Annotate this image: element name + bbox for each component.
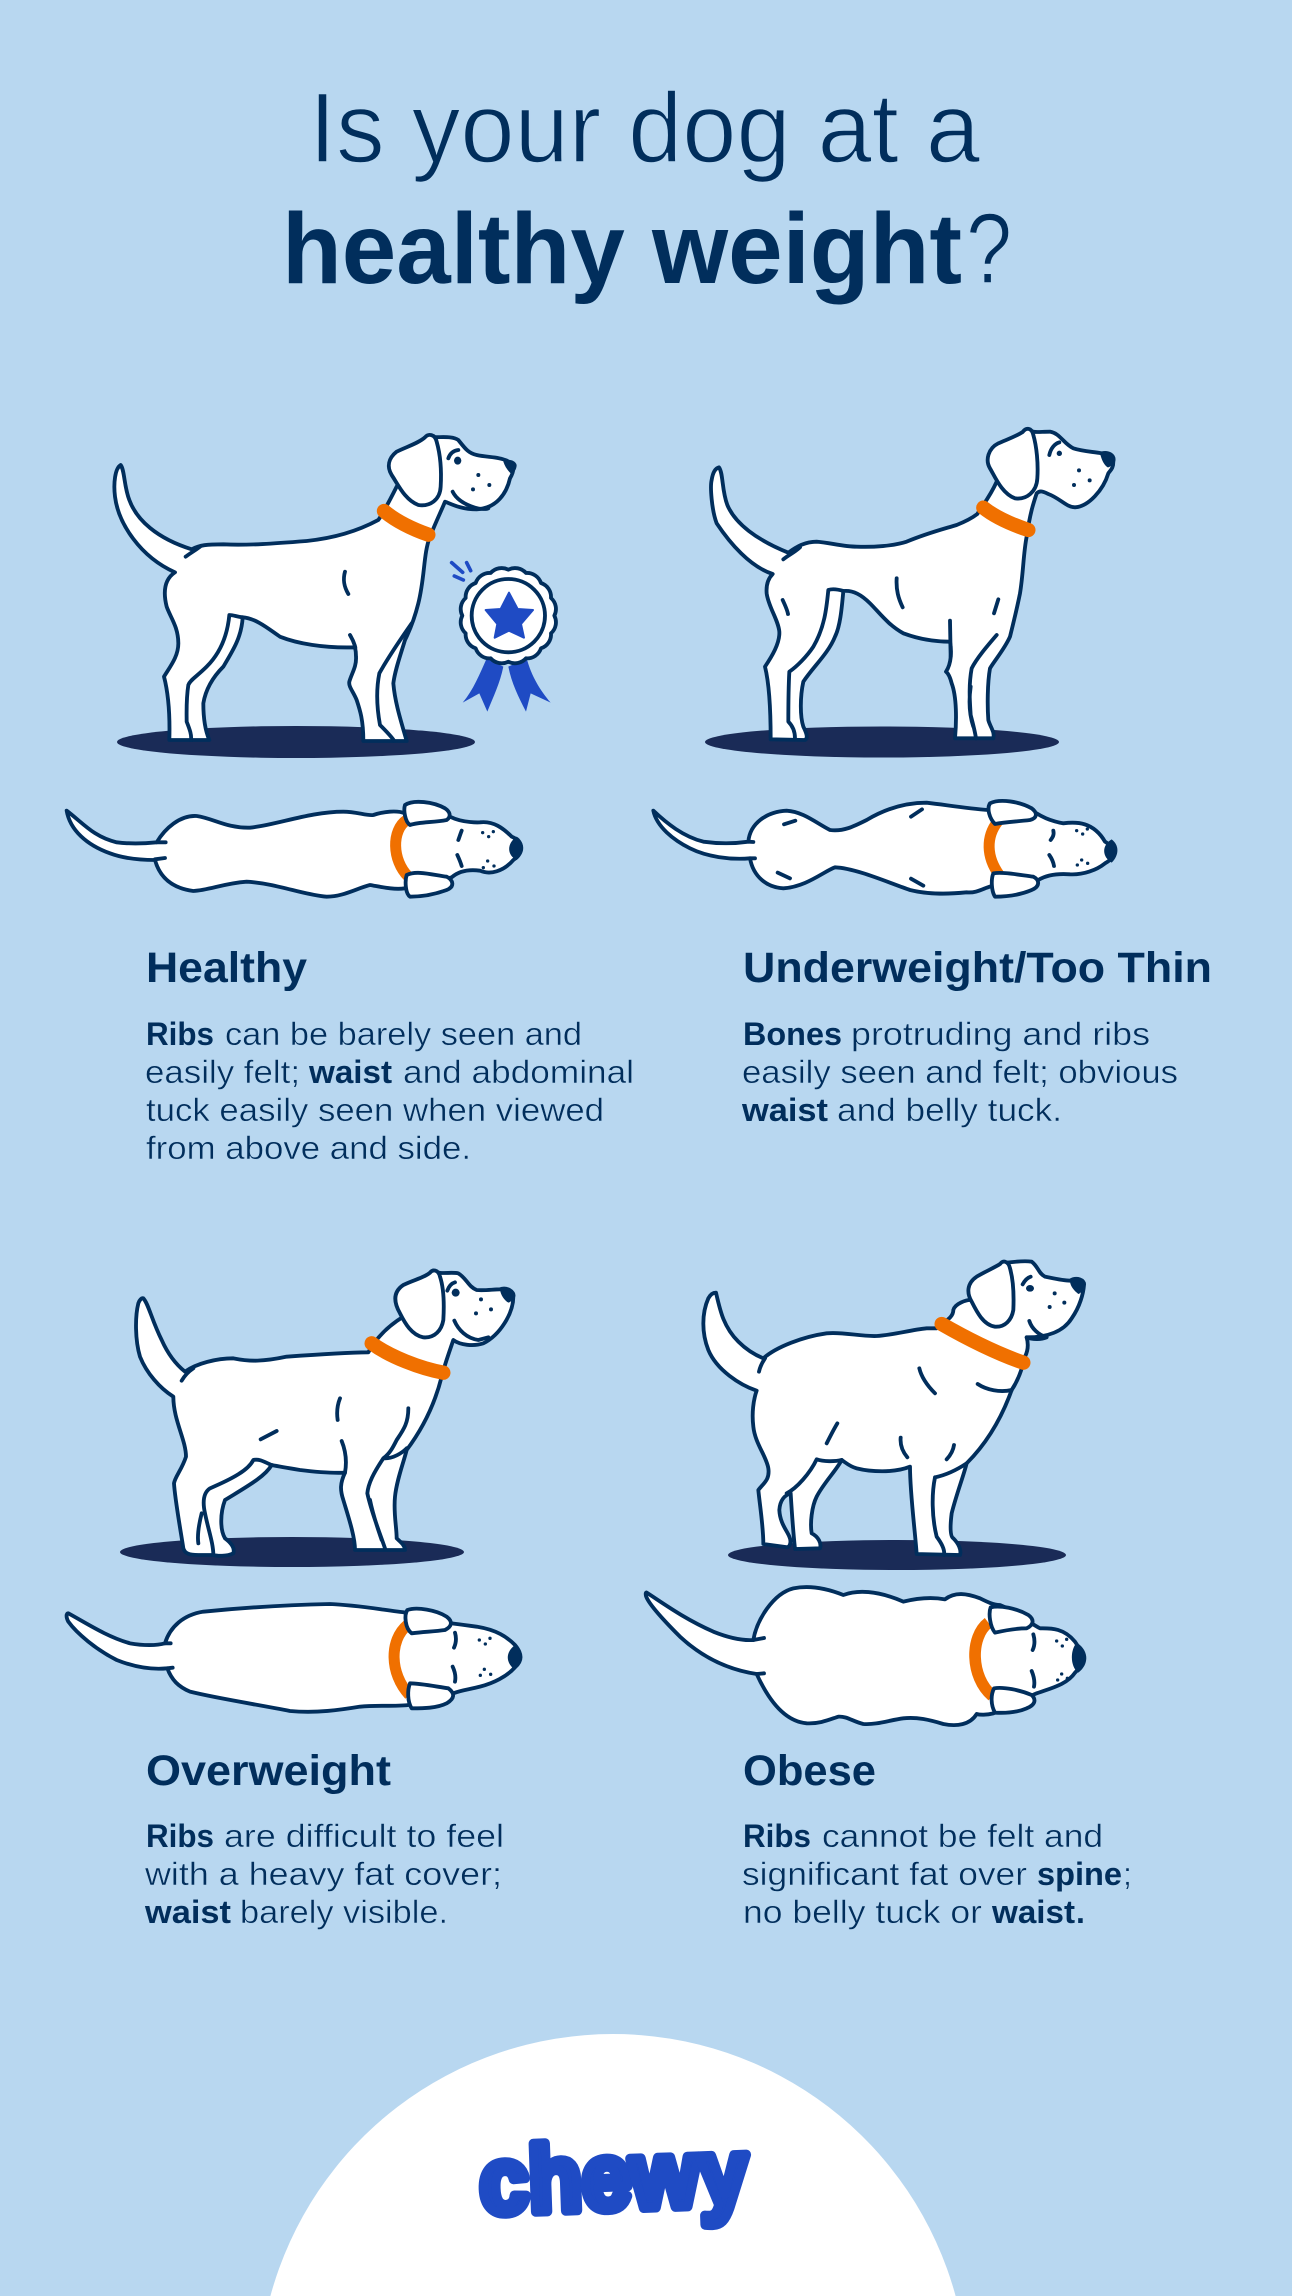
text: Healthy description: Ribs (146, 1016, 214, 1052)
shadow: obese dog (728, 1540, 1066, 1570)
illustration: underweight dog side view (711, 429, 1114, 740)
text: Healthy description: easily felt; (145, 1054, 300, 1090)
text: Healthy description (145, 1016, 634, 1166)
text: Overweight description: with a heavy fat cover; (144, 1856, 502, 1892)
shadow: healthy dog (117, 726, 475, 758)
heading: Underweight/Too Thin: Underweight/Too Thin (743, 944, 1212, 992)
text: Obese description: waist (991, 1894, 1075, 1930)
text: Obese description: ; (1123, 1856, 1132, 1892)
text: Overweight description: waist (144, 1894, 231, 1930)
illustration: overweight dog side view (136, 1271, 514, 1556)
illustration: obese dog side view (703, 1261, 1085, 1555)
panel: obese (646, 1261, 1132, 1930)
text: Healthy description: tuck easily seen when viewed (146, 1092, 604, 1128)
shadow: overweight dog (120, 1537, 464, 1567)
illustration: healthy dog side view (114, 435, 517, 741)
panel: healthy (67, 435, 634, 1166)
text: Obese description: cannot be felt and (822, 1818, 1103, 1854)
illustration: overweight dog top view (67, 1604, 521, 1712)
illustration: healthy dog top view (67, 802, 523, 897)
text: Underweight description: easily seen and felt; obvious (742, 1054, 1178, 1090)
text: Overweight description: are difficult to feel (224, 1818, 504, 1854)
panel: overweight (67, 1271, 521, 1930)
text: Obese description: Ribs (743, 1818, 811, 1854)
title: Is your dog at a (309, 72, 981, 183)
text: Obese description: spine (1037, 1856, 1122, 1892)
text: Healthy description: from above and side. (146, 1130, 471, 1166)
shadow: underweight dog (705, 726, 1059, 758)
text: Overweight description (144, 1818, 504, 1930)
text: Healthy description: can be barely seen and (225, 1016, 582, 1052)
text: Obese description: . (1076, 1894, 1085, 1930)
panel: underweight (653, 429, 1212, 1128)
text: Underweight description (741, 1016, 1178, 1128)
text: Underweight description: protruding and ribs (851, 1016, 1150, 1052)
heading: Obese: Obese (743, 1747, 876, 1795)
text: Underweight description: Bones (743, 1016, 842, 1052)
text: Healthy description: waist (308, 1054, 392, 1090)
text: Obese description (742, 1818, 1132, 1930)
logo: chewy: chewy (478, 2119, 749, 2234)
title (282, 72, 1012, 305)
text: Underweight description: and belly tuck. (837, 1092, 1062, 1128)
illustration: obese dog top view (646, 1587, 1086, 1725)
footer: white hill (270, 2034, 956, 2296)
illustration: underweight dog top view (653, 801, 1117, 897)
text: Overweight description: Ribs (146, 1818, 214, 1854)
icon: award rosette (452, 563, 556, 712)
text: Obese description: no belly tuck or (743, 1894, 982, 1930)
text: Obese description: significant fat over (742, 1856, 1027, 1892)
heading: Healthy: Healthy (146, 944, 307, 992)
heading: Overweight: Overweight (146, 1747, 391, 1795)
title: ? (966, 193, 1012, 305)
text: Underweight description: waist (741, 1092, 828, 1128)
title: healthy weight (282, 193, 962, 305)
text: Overweight description: barely visible. (240, 1894, 448, 1930)
text: Healthy description: and abdominal (403, 1054, 634, 1090)
